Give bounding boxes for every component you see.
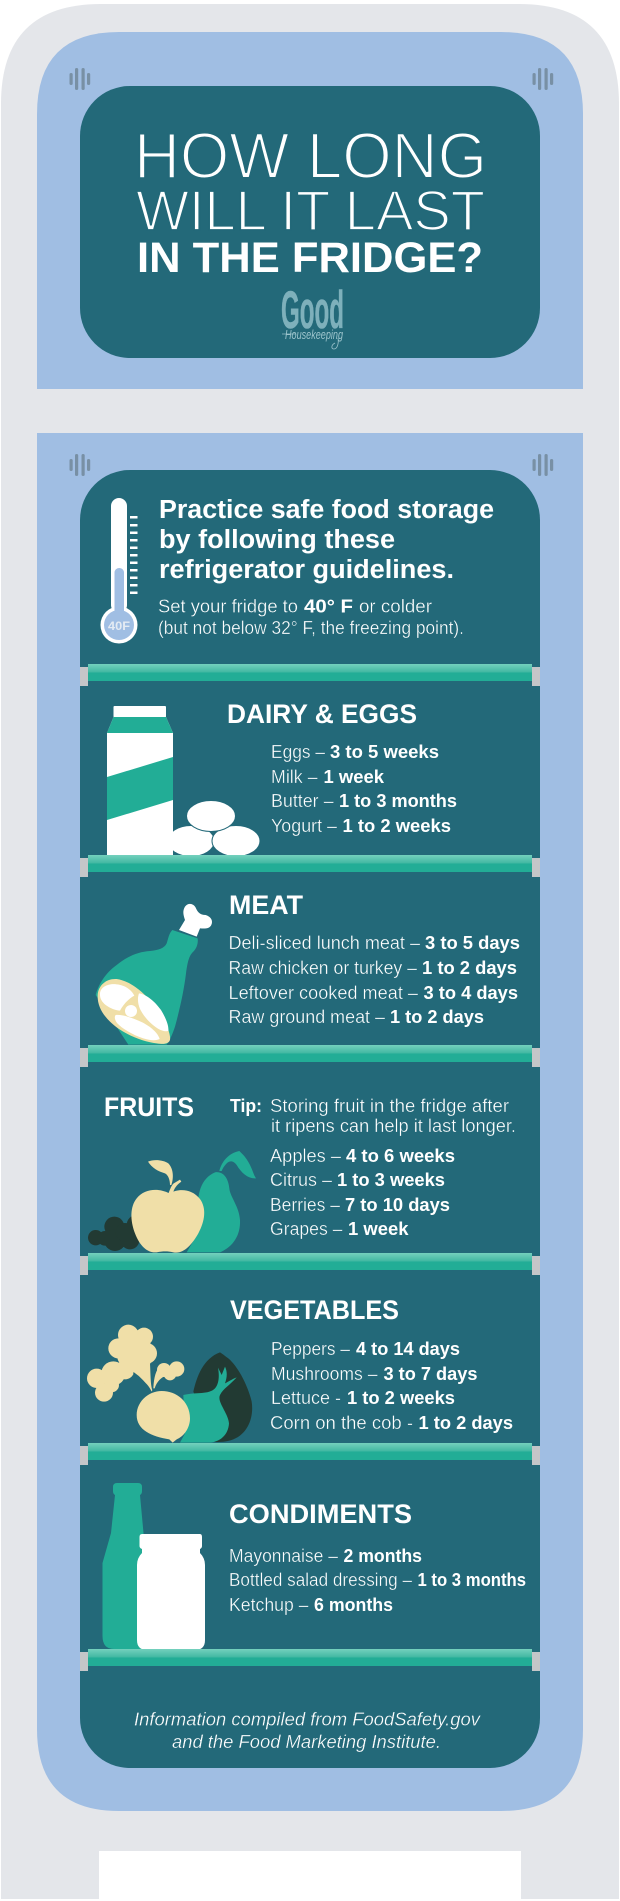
icon: bottle and jar — [102, 1483, 205, 1650]
list: condiments: 2 months — [344, 1546, 422, 1566]
heading: meat: MEAT — [229, 890, 303, 920]
list: dairy and eggs — [271, 741, 457, 836]
source note: Information compiled from FoodSafety.gov — [134, 1710, 481, 1730]
icon: eggs — [168, 800, 260, 856]
list: dairy and eggs: 1 to 2 weeks — [342, 816, 451, 836]
icon: thermometer: 40F — [108, 621, 130, 633]
shelf 3 — [80, 1045, 540, 1067]
shelf 1 — [80, 664, 540, 686]
list: meat: 1 to 2 days — [422, 958, 517, 978]
list: vegetables: Corn on the cob - — [270, 1412, 413, 1433]
intro text: (but not below 32° F, the freezing point). — [158, 617, 464, 638]
list: condiments — [229, 1545, 526, 1615]
title — [134, 119, 487, 282]
tip — [230, 1095, 516, 1136]
vent: lower right — [532, 454, 553, 476]
main panel — [80, 470, 540, 1768]
list: vegetables: 1 to 2 days — [418, 1413, 513, 1433]
list: meat — [228, 932, 520, 1027]
list: condiments: Ketchup – — [229, 1594, 309, 1615]
list: dairy and eggs: Eggs – — [271, 741, 326, 762]
title panel — [80, 86, 540, 358]
list: dairy and eggs: Butter – — [271, 790, 334, 811]
list: condiments: 1 to 3 months — [418, 1570, 526, 1590]
list: vegetables: Peppers – — [271, 1338, 351, 1359]
source note: and the Food Marketing Institute. — [172, 1732, 441, 1752]
logo: Good Housekeeping: Housekeeping — [285, 327, 344, 342]
logo: Good Housekeeping — [281, 281, 344, 349]
list: dairy and eggs: 1 to 3 months — [339, 791, 457, 811]
list: dairy and eggs: 1 week — [324, 767, 385, 787]
list: vegetables — [270, 1338, 513, 1433]
list: dairy and eggs: 3 to 5 weeks — [330, 742, 439, 762]
fridge base plate — [99, 1851, 521, 1899]
icon: fruits — [88, 1151, 256, 1253]
list: meat: Raw ground meat – — [228, 1006, 386, 1027]
list: fruits: Berries – — [270, 1194, 341, 1215]
list: meat: Raw chicken or turkey – — [228, 957, 418, 978]
list: fruits: 1 week — [348, 1219, 410, 1239]
list: dairy and eggs: Yogurt – — [271, 815, 338, 836]
title: HOW LONG — [134, 119, 487, 192]
vent: top right — [532, 68, 553, 90]
icon: thermometer — [100, 498, 138, 644]
list: vegetables: 3 to 7 days — [384, 1364, 478, 1384]
list: vegetables: Lettuce - — [271, 1387, 341, 1408]
title: WILL IT LAST — [136, 179, 485, 243]
shelf 6 — [80, 1649, 540, 1671]
list: fruits: Apples – — [270, 1145, 342, 1166]
icon: milk carton — [107, 706, 173, 855]
list: fruits — [270, 1145, 455, 1239]
shelf 5 — [80, 1443, 540, 1465]
source note — [134, 1710, 481, 1752]
list: fruits: Citrus – — [270, 1169, 333, 1190]
tip: Tip: — [230, 1096, 262, 1116]
heading: condiments: CONDIMENTS — [229, 1499, 412, 1529]
heading: vegetables: VEGETABLES — [230, 1295, 399, 1325]
intro heading — [159, 496, 494, 584]
list: vegetables: 1 to 2 weeks — [347, 1388, 455, 1408]
list: vegetables: Mushrooms – — [271, 1363, 378, 1384]
icon: vegetables — [87, 1325, 252, 1443]
intro text: 40° F — [304, 596, 353, 616]
intro heading: Practice safe food storage — [159, 496, 494, 524]
intro text: or colder — [359, 596, 432, 616]
heading: dairy and eggs: DAIRY & EGGS — [227, 699, 417, 729]
intro text: Set your fridge to — [158, 596, 298, 616]
list: meat: Leftover cooked meat – — [228, 982, 419, 1003]
shelf 4 — [80, 1253, 540, 1275]
shelf 2 — [80, 855, 540, 877]
list: vegetables: 4 to 14 days — [356, 1339, 460, 1359]
list: meat: 3 to 4 days — [424, 983, 518, 1003]
list: fruits: 7 to 10 days — [345, 1195, 450, 1215]
freezer door panel — [37, 32, 583, 389]
list: meat: 3 to 5 days — [425, 933, 520, 953]
list: meat: 1 to 2 days — [390, 1007, 484, 1027]
intro text — [158, 596, 464, 638]
vent: top left — [70, 68, 90, 90]
list: condiments: Bottled salad dressing – — [229, 1569, 413, 1590]
list: fruits: Grapes – — [270, 1218, 343, 1239]
list: condiments: Mayonnaise – — [229, 1545, 339, 1566]
vent: lower left — [70, 454, 90, 476]
list: meat: Deli-sliced lunch meat – — [228, 932, 421, 953]
list: fruits: 4 to 6 weeks — [346, 1146, 455, 1166]
fridge door panel — [37, 433, 583, 1811]
tip: it ripens can help it last longer. — [271, 1115, 516, 1136]
title: IN THE FRIDGE? — [137, 234, 483, 282]
intro heading: by following these — [159, 526, 395, 554]
title panel: Good — [281, 281, 344, 340]
intro heading: refrigerator guidelines. — [159, 556, 454, 584]
list: condiments: 6 months — [314, 1595, 393, 1615]
tip: Storing fruit in the fridge after — [270, 1095, 509, 1116]
list: dairy and eggs: Milk – — [271, 766, 318, 787]
heading: fruits: FRUITS — [104, 1092, 194, 1122]
icon: ham — [96, 904, 212, 1045]
list: fruits: 1 to 3 weeks — [337, 1170, 445, 1190]
